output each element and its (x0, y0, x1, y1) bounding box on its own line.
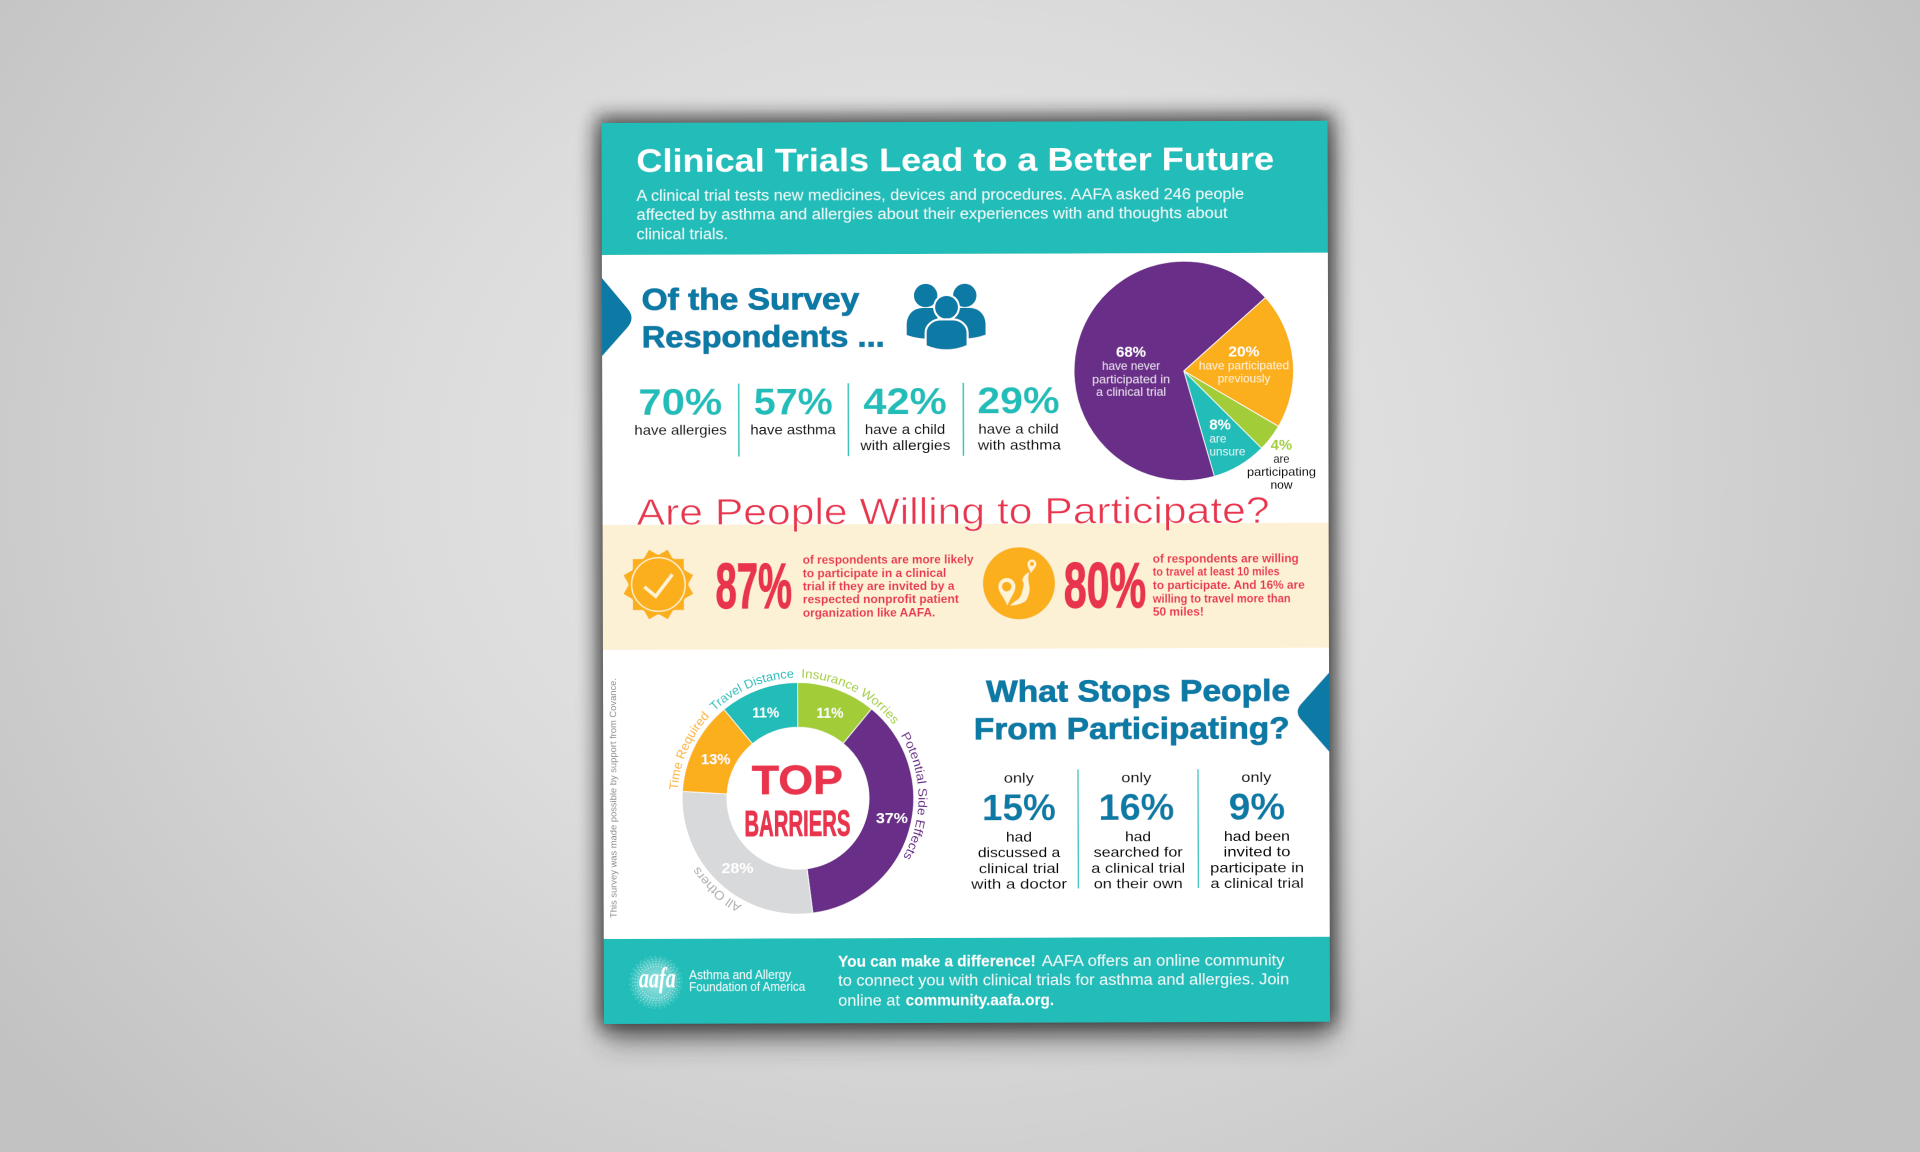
stat: 80% (1064, 549, 1305, 621)
stat: 16% searched on their own: searched for (1094, 844, 1183, 860)
pie label: 4% (1247, 438, 1316, 492)
text: more likely to participate: trial if they are invited by a (803, 579, 955, 594)
left tab arrow (602, 278, 632, 356)
stat: 16% searched on their own: only (1121, 769, 1151, 785)
stat: 15% discussed with a doctor: discussed a (978, 844, 1060, 860)
pie label: 68%: 68% (1116, 345, 1146, 361)
pie label: 8%: are (1209, 431, 1227, 445)
donut percentages (701, 705, 908, 877)
stat: 57% have asthma: 57% (754, 381, 833, 423)
intro text: clinical trials. (637, 226, 728, 243)
stat: 42% have a child with allergies: with allergies (859, 437, 950, 453)
icon: map route (983, 547, 1055, 619)
stat: 57% have asthma: have asthma (750, 421, 836, 438)
text: more likely to participate: organization like AAFA. (803, 605, 935, 620)
logo: aafa (629, 955, 683, 1009)
donut curved labels: Travel Distance (709, 670, 794, 710)
text: willing to travel: to travel at least 10 miles (1153, 565, 1280, 579)
call to action text: community.aafa.org. (906, 992, 1054, 1009)
stat: 70% have allergies (634, 382, 727, 438)
donut percentages: 11% (752, 706, 779, 722)
stat: 9% invited to participate: participate in (1210, 859, 1304, 876)
text: more likely to participate (803, 552, 974, 620)
heading: what stops people (974, 673, 1290, 746)
intro text: A clinical trial tests new medicines, devices and procedures. AAFA asked 246 people (636, 186, 1244, 205)
pie label: 20%: previously (1218, 372, 1270, 386)
call to action text: You can make a difference! (838, 953, 1036, 971)
organisation name: Foundation of America (689, 980, 805, 994)
stat: 29% have a child with asthma: 29% (977, 380, 1060, 421)
stat: 9% invited to participate: invited to (1224, 843, 1291, 860)
stat: 9% invited to participate: a clinical trial (1210, 875, 1304, 891)
text: more likely to participate: of respondents are more likely (803, 552, 974, 567)
text: willing to travel: to participate. And 16% are (1153, 578, 1305, 592)
stat: 70% have allergies: have allergies (634, 422, 727, 438)
stat: 29% have a child with asthma: with asthma (977, 437, 1061, 453)
text: more likely to participate: to participate in a clinical (803, 566, 946, 580)
donut percentages: 13% (701, 752, 731, 768)
survey credit note: This survey was made possible by support from Covance. (608, 678, 620, 918)
pie label: 8% (1209, 418, 1246, 459)
stat: 15% discussed with a doctor: with a doctor (970, 876, 1067, 892)
stat: 42% have a child with allergies: have a child (865, 421, 945, 437)
donut chart: top barriers (668, 668, 928, 914)
stat: 16% searched on their own: on their own (1094, 875, 1183, 892)
donut percentages: 37% (876, 811, 908, 827)
pie label: 8%: 8% (1209, 418, 1231, 434)
stat: 9% invited to participate (1210, 769, 1304, 891)
call to action text: AAFA offers an online community (1042, 952, 1285, 970)
intro text: affected by asthma and allergies about their experiences with and thoughts about (637, 205, 1228, 224)
donut curved labels (668, 668, 928, 911)
pie label: 4%: are (1273, 452, 1290, 466)
pie label: 20% (1199, 345, 1289, 386)
stat: 87%: 87% (715, 550, 792, 622)
pie chart: participation (1074, 261, 1316, 492)
stat: 9% invited to participate: had been (1224, 828, 1290, 844)
donut percentages: 11% (816, 706, 844, 722)
intro text (636, 186, 1244, 243)
stat: 42% have a child with allergies (859, 381, 950, 453)
organisation name: Asthma and Allergy (689, 968, 792, 982)
donut percentages: 28% (722, 861, 754, 877)
text: willing to travel: 50 miles! (1153, 605, 1204, 619)
donut centre label (744, 757, 850, 844)
heading: of the survey respondents: Respondents ... (642, 319, 885, 354)
icon: people (907, 284, 986, 351)
donut curved labels: All Others (694, 867, 742, 911)
heading: are people willing to participate: Are People Willing to Participate? (637, 490, 1270, 533)
pie label: 68%: have never (1102, 359, 1160, 373)
pie label: 4%: 4% (1271, 438, 1292, 454)
stat: 16% searched on their own: had (1125, 828, 1151, 844)
stat: 9% invited to participate: 9% (1229, 786, 1285, 827)
organisation name (689, 968, 805, 994)
stat: 87% (715, 550, 974, 622)
icon: check badge (623, 550, 693, 619)
header band (602, 121, 1328, 255)
footer band (604, 937, 1330, 1024)
pie label: 8%: unsure (1209, 444, 1246, 459)
stat: 29% have a child with asthma: have a child (978, 421, 1059, 437)
stat: 15% discussed with a doctor: had (1006, 828, 1032, 845)
call to action text: online at (838, 992, 901, 1010)
donut curved labels: Time Required (668, 710, 710, 790)
stat: 29% have a child with asthma (977, 380, 1061, 453)
donut curved labels: Insurance Worries (802, 668, 898, 724)
text: willing to travel: willing to travel more than (1152, 591, 1291, 606)
text: willing to travel: of respondents are willing (1153, 551, 1299, 566)
page (602, 121, 1330, 1024)
stat: 15% discussed with a doctor: 15% (982, 787, 1056, 828)
pie label: 68% (1092, 344, 1170, 399)
stat: 15% discussed with a doctor: clinical trial (979, 860, 1059, 876)
stat: 15% discussed with a doctor: only (1004, 770, 1034, 786)
call to action text: to connect you with clinical trials for asthma and allergies. Join (838, 972, 1289, 990)
pie label: 4%: participating (1247, 465, 1316, 479)
heading: of the survey respondents (642, 281, 885, 354)
text: willing to travel (1152, 551, 1305, 619)
logo: aafa: aafa (639, 963, 676, 994)
stat: 57% have asthma (750, 381, 836, 438)
stat: 16% searched on their own: a clinical trial (1091, 860, 1185, 876)
stat: 80%: 80% (1064, 549, 1146, 621)
donut centre label: TOP (752, 757, 843, 803)
pie label: 4%: now (1270, 478, 1293, 492)
pie label: 68%: a clinical trial (1096, 385, 1166, 399)
heading: what stops people: From Participating? (974, 710, 1290, 746)
stat: 70% have allergies: 70% (638, 382, 722, 423)
title: Clinical Trials Lead to a Better Future (636, 141, 1274, 179)
stat: 15% discussed with a doctor (970, 770, 1067, 892)
stat: 42% have a child with allergies: 42% (863, 381, 947, 422)
heading: of the survey respondents: Of the Survey (642, 281, 860, 317)
right tab arrow (1298, 673, 1329, 752)
stat: 16% searched on their own: 16% (1099, 786, 1174, 828)
pie label: 20%: 20% (1228, 345, 1260, 361)
pie label: 20%: have participated (1199, 358, 1289, 373)
donut curved labels: Potential Side Effects (901, 732, 928, 860)
text: more likely to participate: respected nonprofit patient (803, 592, 959, 607)
panel: willingness band (603, 523, 1329, 650)
call to action text (838, 952, 1289, 1010)
stat: 9% invited to participate: only (1241, 769, 1271, 785)
donut centre label: BARRIERS (744, 803, 850, 844)
stat: 16% searched on their own (1091, 769, 1185, 892)
pie label: 68%: participated in (1092, 372, 1170, 386)
heading: what stops people: What Stops People (986, 673, 1290, 709)
